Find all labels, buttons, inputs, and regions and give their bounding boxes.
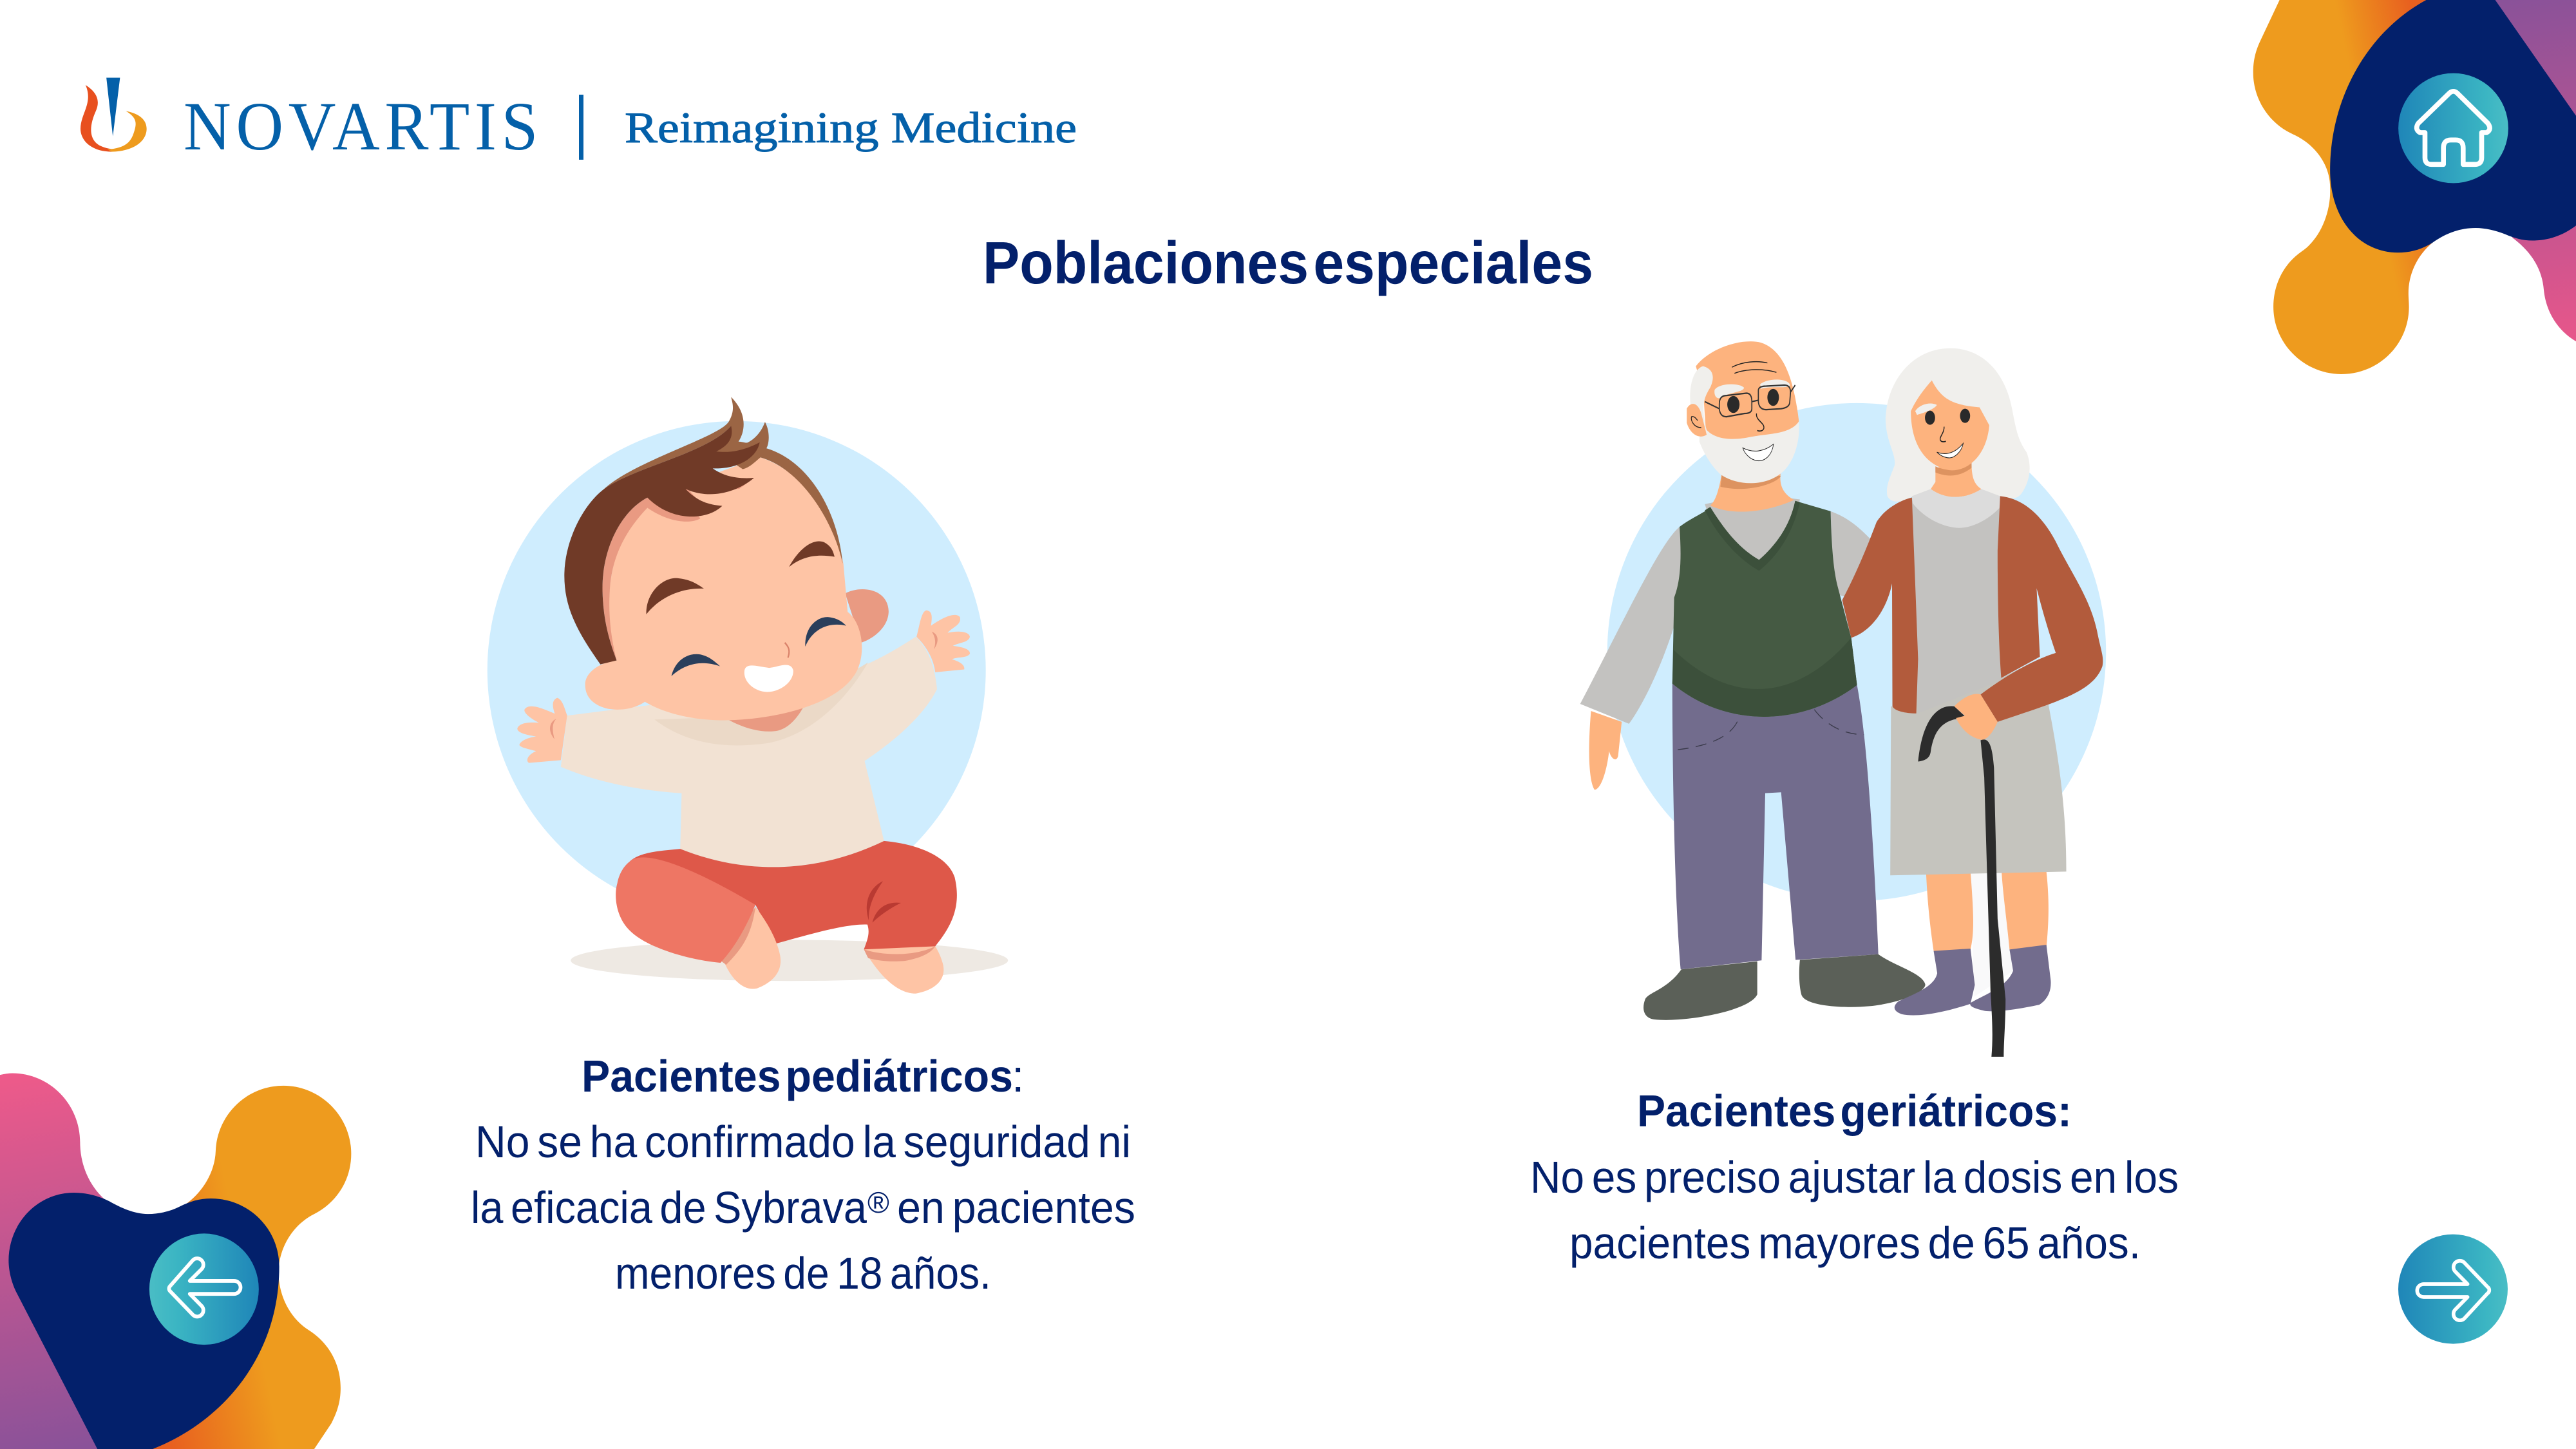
icon: house <box>2417 91 2490 164</box>
tagline: Reimagining Medicine <box>625 103 1077 152</box>
body line 2: en pacientes <box>897 1182 1135 1233</box>
logo: Novartis Reimagining Medicine <box>80 78 1077 165</box>
face <box>647 578 704 614</box>
body line 2: ® <box>867 1186 889 1219</box>
woman <box>1842 348 2103 1057</box>
sweater <box>561 637 937 867</box>
heading: : <box>1012 1051 1024 1101</box>
hair <box>603 397 843 564</box>
trousers <box>630 841 957 954</box>
icon: right arrow <box>2417 1261 2489 1320</box>
heading: Pacientes pediátricos <box>582 1051 1013 1101</box>
text block: geriatric patients <box>1530 1086 2179 1268</box>
body line 2 <box>471 1182 1135 1233</box>
text block: pediatric patients <box>471 1051 1135 1298</box>
head <box>585 457 862 721</box>
hands <box>517 698 567 763</box>
body line 1: No es preciso ajustar la dosis en los <box>1530 1152 2179 1202</box>
wordmark: NOVARTIS <box>184 89 543 165</box>
body line 1: No se ha confirmado la seguridad ni <box>475 1117 1131 1167</box>
man <box>1580 341 1926 1020</box>
icon: flame <box>80 78 147 152</box>
decorative blobs: bottom left corner with back button <box>0 1073 351 1449</box>
home button <box>2398 73 2508 183</box>
title: Poblaciones especiales <box>983 229 1593 296</box>
icon: left arrow <box>169 1258 241 1316</box>
illustration: baby <box>488 397 1008 994</box>
back button <box>149 1233 259 1345</box>
body line 2: pacientes mayores de 65 años. <box>1569 1218 2141 1268</box>
illustration: elderly couple <box>1580 341 2106 1057</box>
next button <box>2398 1235 2508 1344</box>
decorative blobs: top right corner with home button <box>2253 0 2576 374</box>
icon: walking cane <box>1918 706 1967 762</box>
body line 2: la eficacia de Sybrava <box>471 1182 867 1233</box>
heading: Pacientes geriátricos: <box>1637 1086 2072 1136</box>
body line 3: menores de 18 años. <box>615 1248 991 1298</box>
